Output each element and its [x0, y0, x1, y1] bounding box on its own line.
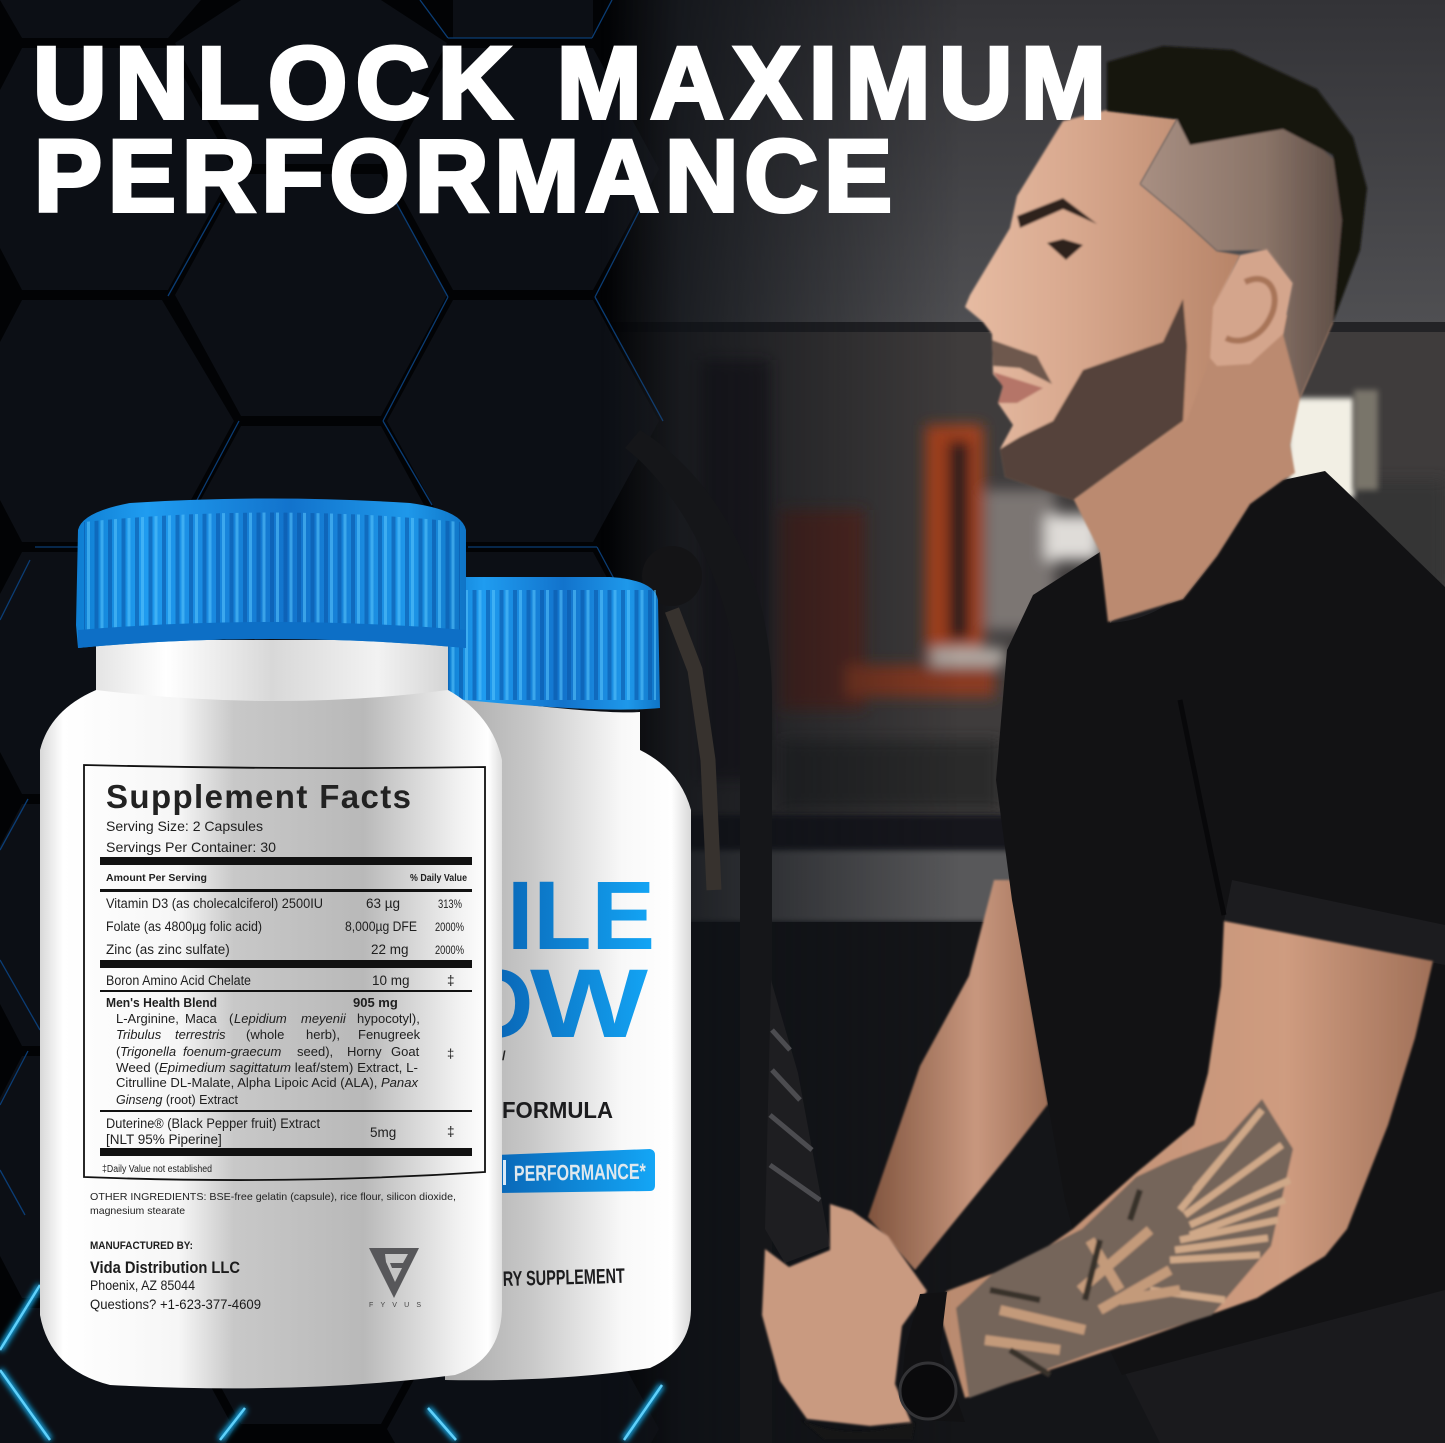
- rear bottle brand letters: W: [530, 949, 649, 1058]
- title: [33, 26, 1106, 233]
- blend: hypocotyl),: [357, 1011, 420, 1026]
- gym background: blurred room: [644, 0, 1445, 922]
- blend: Citrulline DL-Malate, Alpha Lipoic Acid (ALA), Panax: [116, 1075, 418, 1090]
- man: ear: [1210, 249, 1293, 366]
- blend: Goat: [391, 1044, 420, 1059]
- rear bottle brand letters: [458, 861, 655, 1058]
- rear bottle: [445, 577, 691, 1380]
- blend: foenum-graecum: [183, 1044, 281, 1059]
- boron row: [106, 973, 455, 988]
- serving info: Serving Size: 2 Capsules: [106, 818, 263, 834]
- blend: 905 mg: [353, 995, 398, 1010]
- man: black t-shirt: [996, 471, 1445, 1375]
- facts header row: [106, 872, 467, 884]
- duterine row: ‡: [447, 1124, 455, 1139]
- nutrient rows: 2000%: [435, 943, 464, 957]
- man: wristwatch: [900, 1292, 965, 1422]
- battle rope and carabiner: [625, 430, 830, 1443]
- blend: Ginseng (root) Extract: [116, 1092, 238, 1107]
- nutrient rows: Vitamin D3 (as cholecalciferol) 2500IU: [106, 896, 323, 911]
- man: near arm with wing tattoo: [938, 921, 1433, 1398]
- rear bottle small marks: /: [502, 1048, 506, 1063]
- blend: meyenii: [301, 1011, 347, 1026]
- duterine row: Duterine® (Black Pepper fruit) Extract: [106, 1116, 320, 1131]
- manufacturer: [90, 1240, 261, 1312]
- man: beard: [1000, 299, 1187, 500]
- boron row: 10 mg: [372, 973, 410, 988]
- blend: ‡: [447, 1046, 454, 1061]
- man: eye: [1047, 239, 1083, 260]
- man: trousers: [1122, 1277, 1445, 1443]
- title: PERFORMANCE: [34, 119, 892, 233]
- blend: Men's Health Blend: [106, 995, 217, 1010]
- neon light streaks, bottom left: [0, 1285, 662, 1440]
- boron row: Boron Amino Acid Chelate: [106, 973, 251, 988]
- blend: Lepidium: [234, 1011, 287, 1026]
- title: UNLOCK MAXIMUM: [33, 26, 1106, 140]
- nutrient rows: 313%: [438, 897, 462, 911]
- rear bottle brand letters: O: [458, 949, 533, 1058]
- other ingredients: OTHER INGREDIENTS: BSE-free gelatin (capsule), rice flour, silicon dioxide,: [90, 1191, 456, 1203]
- front bottle body: [40, 690, 502, 1388]
- footnote: ‡Daily Value not established: [102, 1164, 212, 1175]
- nutrient rows: [106, 896, 464, 957]
- duterine row: [106, 1116, 455, 1147]
- man: face: [965, 110, 1240, 500]
- duterine row: 5mg: [370, 1125, 396, 1140]
- nutrient rows: Zinc (as zinc sulfate): [106, 942, 230, 957]
- front bottle neck: [96, 640, 448, 701]
- rear bottle performance badge: [495, 1149, 655, 1193]
- rear bottle formula text: FORMULA: [502, 1097, 613, 1123]
- rear bottle cap: [445, 577, 660, 710]
- blend: (: [116, 1044, 121, 1059]
- rear bottle body: [445, 695, 691, 1380]
- blend: Trigonella: [120, 1044, 176, 1059]
- facts heading: Supplement Facts: [106, 778, 411, 815]
- blend: [106, 995, 454, 1107]
- blend: Fenugreek: [358, 1027, 421, 1042]
- manufacturer: Questions? +1-623-377-4609: [90, 1296, 261, 1312]
- Fyvus logo: [369, 1248, 421, 1309]
- manufacturer: Phoenix, AZ 85044: [90, 1277, 195, 1293]
- nutrient rows: 2000%: [435, 920, 464, 934]
- man: moustache: [992, 340, 1052, 384]
- man: far arm: [868, 880, 1048, 1270]
- man: brow: [1017, 198, 1097, 228]
- front bottle: [40, 498, 502, 1388]
- man: neck: [1073, 300, 1333, 622]
- rear bottle supplement text: RY SUPPLEMENT: [503, 1265, 625, 1291]
- nutrient rows: 8,000µg DFE: [345, 919, 417, 934]
- man: lips: [993, 372, 1043, 403]
- blend: seed),: [297, 1044, 333, 1059]
- facts header row: % Daily Value: [410, 872, 467, 884]
- other ingredients: magnesium stearate: [90, 1205, 185, 1217]
- serving info: Servings Per Container: 30: [106, 839, 276, 855]
- blend: L-Arginine,: [116, 1011, 179, 1026]
- blend: Maca: [185, 1011, 218, 1026]
- blend: herb),: [306, 1027, 340, 1042]
- blend: Weed (Epimedium sagittatum leaf/stem) Extract, L-: [116, 1060, 418, 1075]
- serving info: [106, 818, 276, 855]
- man: hands on rope: [762, 1204, 927, 1440]
- man: hair: [1107, 46, 1367, 398]
- nutrient rows: 63 µg: [366, 896, 400, 911]
- blend: (whole: [246, 1027, 284, 1042]
- nutrient rows: Folate (as 4800µg folic acid): [106, 919, 262, 934]
- rear bottle brand letters: ILE: [507, 861, 655, 970]
- rear bottle performance badge: PERFORMANCE*: [514, 1159, 646, 1186]
- nutrient rows: 22 mg: [371, 942, 409, 957]
- Fyvus logo: FYVUS: [369, 1302, 421, 1309]
- blend: terrestris: [175, 1027, 226, 1042]
- facts header row: Amount Per Serving: [106, 872, 207, 884]
- supplement facts panel: [84, 765, 485, 1180]
- boron row: ‡: [447, 973, 455, 988]
- blend: Tribulus: [116, 1027, 162, 1042]
- tattoo: wing: [956, 1099, 1293, 1398]
- manufacturer: Vida Distribution LLC: [90, 1258, 240, 1277]
- blend: Horny: [347, 1044, 382, 1059]
- duterine row: [NLT 95% Piperine]: [106, 1132, 222, 1147]
- manufacturer: MANUFACTURED BY:: [90, 1240, 193, 1252]
- blend: (: [229, 1011, 234, 1026]
- front bottle cap: [76, 498, 466, 648]
- other ingredients: [90, 1191, 456, 1217]
